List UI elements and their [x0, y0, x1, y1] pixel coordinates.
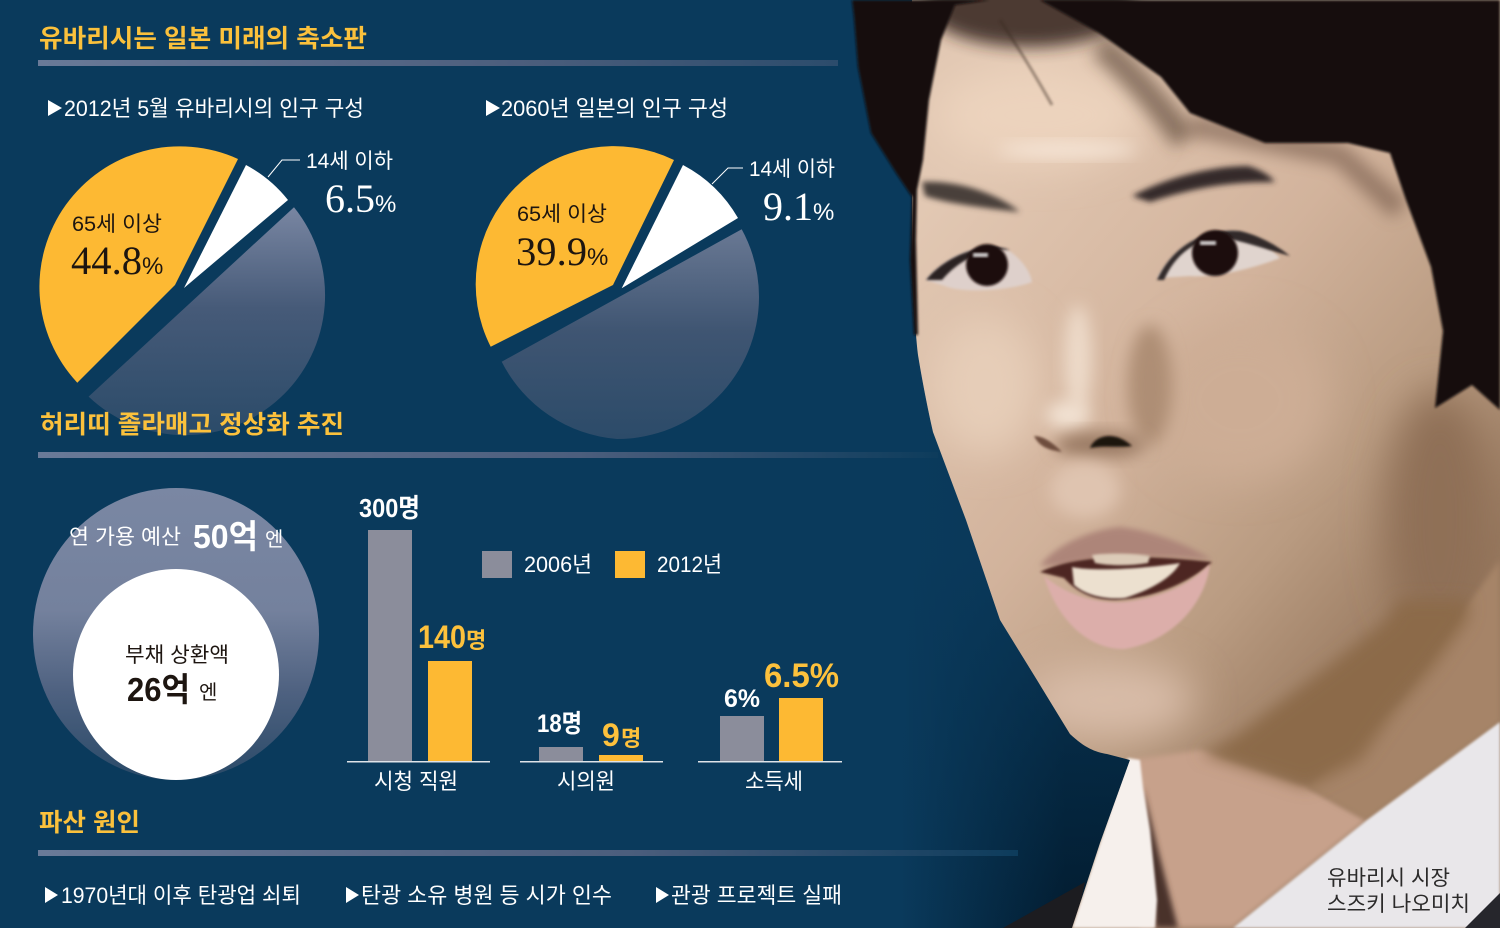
- section 2: 허리띠 졸라매고 정상화 추진: [33, 411, 938, 794]
- label 65+: 65세 이상: [517, 203, 607, 226]
- heading: 유바리시는 일본 미래의 축소판: [39, 25, 367, 53]
- right collar: [1233, 722, 1500, 928]
- pie chart 2060: [476, 146, 759, 439]
- budget label: 엔: [265, 528, 283, 551]
- debt label: 부채 상환액: [125, 644, 229, 667]
- label 14-: %: [375, 191, 396, 218]
- upper lip: [1040, 527, 1212, 566]
- section 1: 유바리시는 일본 미래의 축소판: [38, 25, 838, 439]
- cheeks: [930, 315, 1040, 455]
- legend: 2012년: [657, 552, 722, 577]
- debt label: 엔: [199, 681, 217, 704]
- label 65+: 65세 이상: [72, 213, 162, 236]
- panel: 2060 pie: [476, 96, 835, 439]
- hair: [852, 0, 1500, 410]
- forehead top shade from thin hair: [925, 0, 1135, 47]
- label 65+: 39.9: [516, 229, 587, 274]
- bar chart: council members: 18명: [537, 710, 582, 738]
- photo caption: 스즈키 나오미치: [1327, 893, 1470, 916]
- bar chart: council members: [520, 710, 663, 794]
- nose shading: [1064, 305, 1092, 415]
- left collar: [1072, 758, 1157, 928]
- label 14-: 14세 이하: [306, 150, 393, 173]
- budget label: [69, 518, 283, 555]
- left eye: [926, 244, 1032, 290]
- bar chart: city staff: 300명: [359, 493, 420, 523]
- neck: [1130, 750, 1367, 928]
- bar chart: income tax: 6%: [724, 685, 760, 713]
- label 65+: 44.8: [71, 238, 142, 283]
- budget label: 50억: [193, 518, 258, 555]
- right eye: [1157, 230, 1290, 280]
- legend: [482, 551, 722, 578]
- bar chart: council members: 9: [602, 717, 620, 753]
- debt label: [125, 644, 229, 708]
- pie chart 2012: [39, 146, 325, 435]
- nostrils: [1034, 436, 1132, 452]
- heading: 파산 원인: [39, 809, 140, 837]
- budget circles: [33, 488, 319, 780]
- mouth: [1040, 527, 1212, 649]
- bar chart: income tax: 6.5%: [764, 657, 839, 695]
- portrait photo: Yubari mayor: [852, 0, 1500, 928]
- teeth: [1072, 563, 1180, 598]
- panel: 2012 pie: [39, 96, 396, 435]
- bar chart: council members: 시의원: [557, 769, 615, 794]
- section 3: 파산 원인: [38, 809, 1018, 908]
- cause 1: 1970년대 이후 탄광업 쇠퇴: [61, 883, 301, 908]
- bar chart: city staff: 시청 직원: [374, 769, 458, 794]
- label 65+: %: [587, 244, 608, 271]
- face and neck: [900, 0, 1500, 928]
- opening: [1040, 557, 1212, 600]
- lower lip: [1044, 564, 1210, 649]
- debt label: 26억: [127, 671, 190, 708]
- neck shadow next to collar: [1143, 787, 1178, 928]
- photo caption: 유바리시 시장: [1327, 867, 1450, 890]
- subheading: 2012년 5월 유바리시의 인구 구성: [64, 96, 364, 121]
- label 14-: [749, 158, 835, 229]
- label 14-: %: [813, 199, 834, 226]
- label 14-: [306, 150, 396, 221]
- philtrum and chin: [1050, 462, 1120, 518]
- jaw shadow band: [1200, 600, 1470, 787]
- eyebrows: [922, 182, 1020, 212]
- bar chart: council members: 명: [621, 726, 641, 751]
- label 65+: [71, 213, 163, 283]
- label 14-: 6.5: [325, 176, 375, 221]
- jacket: [1003, 882, 1085, 928]
- label 65+: [516, 203, 608, 274]
- bar chart: city staff: 140: [418, 619, 466, 655]
- photo caption: [1327, 867, 1470, 916]
- subheading: 2060년 일본의 인구 구성: [501, 96, 728, 121]
- budget label: 연 가용 예산: [69, 526, 181, 549]
- cause 3: 관광 프로젝트 실패: [671, 883, 842, 908]
- bar chart: income tax: [698, 657, 842, 794]
- bar chart: city staff: 명: [466, 628, 486, 653]
- label 14-: 9.1: [763, 184, 813, 229]
- label 14-: 14세 이하: [749, 158, 835, 181]
- bar chart: income tax: 소득세: [745, 769, 803, 794]
- cause 2: 탄광 소유 병원 등 시가 인수: [361, 883, 612, 908]
- heading: 허리띠 졸라매고 정상화 추진: [40, 411, 344, 439]
- forehead highlight: [958, 74, 1140, 164]
- label 65+: %: [142, 253, 163, 280]
- bar chart: city staff: [347, 493, 490, 794]
- legend: 2006년: [524, 552, 592, 577]
